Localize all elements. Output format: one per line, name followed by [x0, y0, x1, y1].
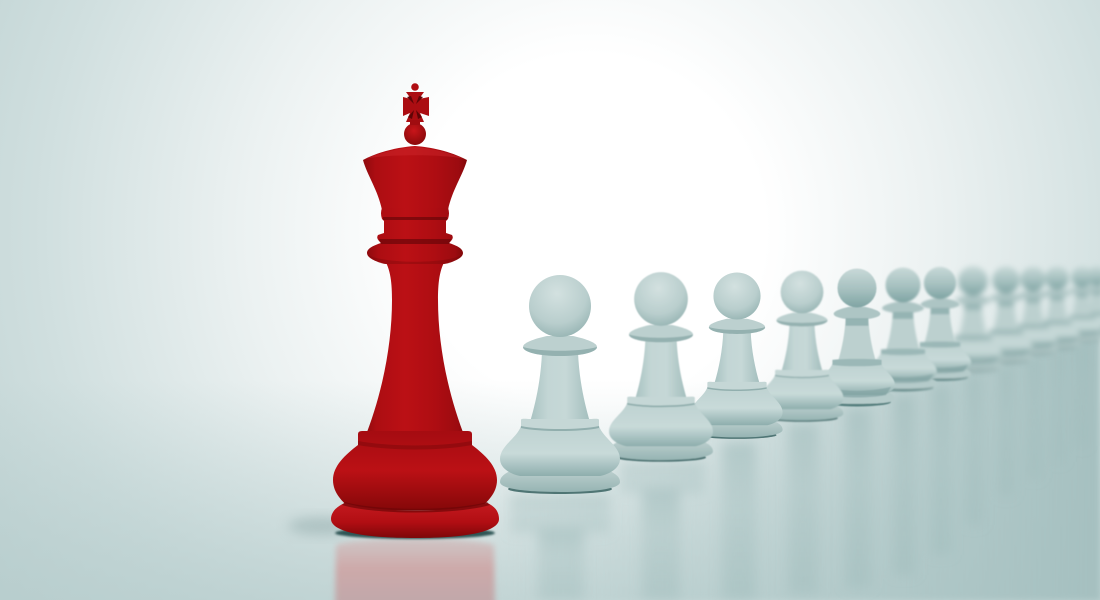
pawn 2	[609, 272, 713, 462]
king foot	[331, 503, 499, 538]
row of white pawns, far to near	[500, 266, 1100, 494]
king body	[364, 258, 466, 440]
pawn 1	[500, 275, 620, 494]
mid pawn 6	[869, 267, 937, 391]
reflections of pawns on the floor	[510, 346, 1087, 600]
king base	[333, 431, 497, 510]
mid pawn 5	[819, 268, 895, 406]
far pawns	[944, 266, 1100, 371]
king neck rings and collar	[367, 208, 463, 264]
king contact shadow	[288, 517, 495, 539]
king finial cross	[403, 83, 429, 145]
king reflection	[335, 538, 495, 600]
red chess king	[331, 83, 499, 538]
pawn 3	[691, 272, 783, 439]
mid pawn 4	[761, 271, 843, 422]
king crown	[363, 146, 467, 210]
mid pawn 7	[909, 267, 971, 381]
